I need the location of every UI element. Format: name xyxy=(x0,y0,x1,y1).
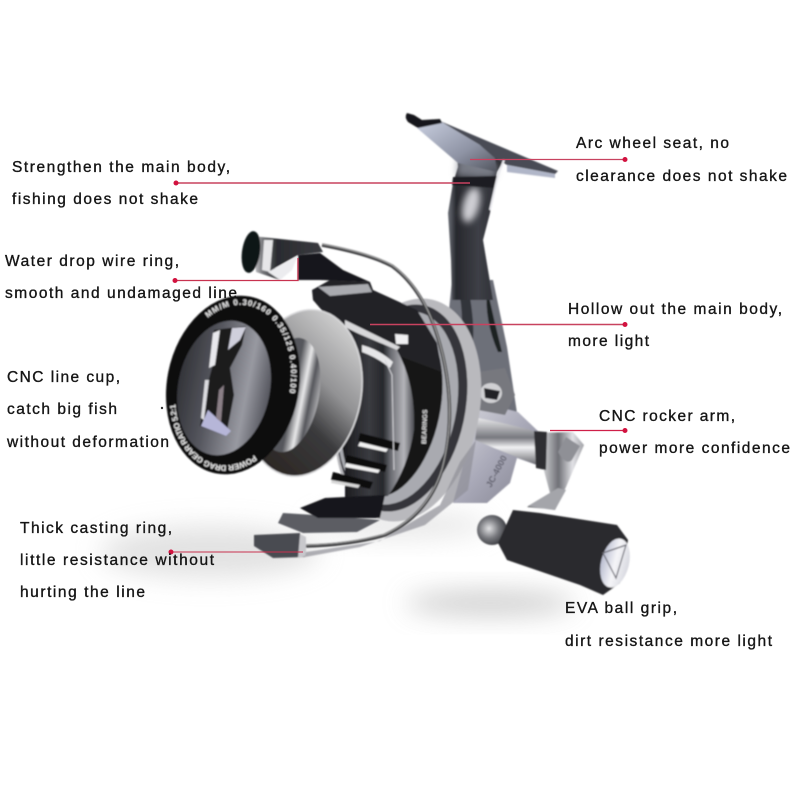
spool body with slots xyxy=(331,328,414,500)
callout: hollow main body xyxy=(370,301,782,350)
callout: strengthen main body: fishing does not shake xyxy=(12,191,198,208)
callout: EVA ball grip: dirt resistance more light xyxy=(565,633,773,650)
callout: CNC line cup xyxy=(6,369,169,451)
callout: thick casting ring: little resistance without xyxy=(20,552,215,569)
rear body and rotor ring xyxy=(315,285,545,535)
rim lettering: MM/M 0.30/160 0.35/125 0.40/100 xyxy=(204,298,298,394)
fishing reel xyxy=(164,112,630,596)
callout: arc wheel seat: Arc wheel seat, no xyxy=(576,135,729,152)
callout: CNC line cup: CNC line cup, xyxy=(7,369,120,386)
reel foot and stem xyxy=(406,113,558,413)
lower bail arm xyxy=(254,440,476,558)
callout: strengthen main body: Strengthen the main body, xyxy=(12,159,230,176)
handle arm xyxy=(527,431,584,510)
callout: arc wheel seat: clearance does not shake xyxy=(576,168,787,185)
rotor cup top xyxy=(312,280,442,372)
callout: CNC line cup: catch big fish xyxy=(7,401,117,418)
callout: thick casting ring: Thick casting ring, xyxy=(20,520,172,537)
drag knob xyxy=(200,326,246,436)
ground shadows xyxy=(100,513,575,615)
bail arm head xyxy=(239,230,370,282)
callout: CNC rocker arm xyxy=(550,408,790,457)
slots xyxy=(331,433,400,489)
rim lettering: POWER DRAG GEAR RATIO 5.2:1 xyxy=(168,403,258,472)
callout: thick casting ring xyxy=(20,520,303,601)
callout: hollow main body: more light xyxy=(568,333,650,350)
spool rim xyxy=(164,294,301,476)
callout: strengthen main body xyxy=(12,159,470,208)
callout: CNC line cup: without deformation xyxy=(6,434,169,451)
callout: water drop wire ring xyxy=(5,253,298,302)
spool flange xyxy=(230,299,376,487)
callout: water drop wire ring: Water drop wire ring, xyxy=(5,253,179,270)
handle grip and knob xyxy=(477,510,635,595)
bail wire xyxy=(305,244,450,546)
callout: EVA ball grip: EVA ball grip, xyxy=(565,600,677,617)
callout: water drop wire ring: smooth and undamaged line xyxy=(5,285,237,302)
rear opening with bearing text: BEARINGS xyxy=(421,409,429,444)
rear opening with bearing text xyxy=(326,310,458,506)
callout: thick casting ring: hurting the line xyxy=(20,584,145,601)
callout: arc wheel seat xyxy=(470,135,787,185)
callout: hollow main body: Hollow out the main body, xyxy=(568,301,782,318)
callout: CNC rocker arm: CNC rocker arm, xyxy=(599,408,735,425)
callout: EVA ball grip xyxy=(565,600,773,650)
spool neck xyxy=(250,333,330,457)
rim lettering xyxy=(168,298,298,472)
body model marking: JC-4000 xyxy=(484,454,509,489)
callout: CNC rocker arm: power more confidence xyxy=(599,440,790,457)
